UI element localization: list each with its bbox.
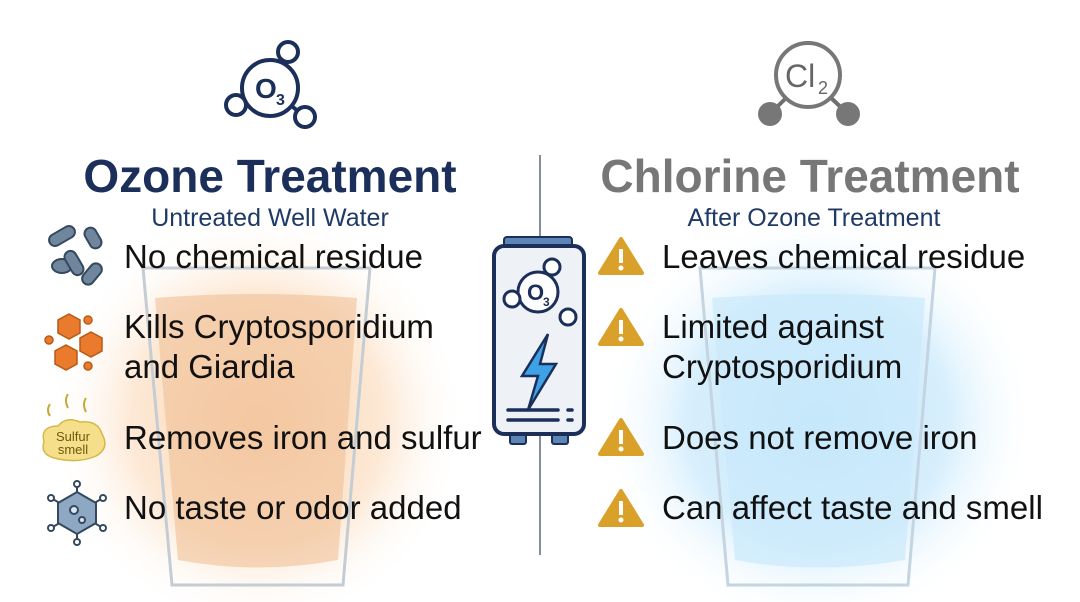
icon: ozone generator: 3 bbox=[543, 295, 550, 309]
icon: sulfur smell bbox=[42, 394, 106, 462]
icon: ozone generator: O bbox=[527, 280, 544, 305]
icon: virus bbox=[47, 480, 107, 546]
text: con 3: Does not remove iron bbox=[662, 419, 977, 456]
text: item 1: No chemical residue bbox=[124, 238, 423, 275]
text: con 2: Limited against bbox=[662, 308, 884, 345]
icon: O3 molecule: O bbox=[255, 73, 277, 104]
subtitle: ozone: Untreated Well Water bbox=[151, 204, 389, 232]
text: con 1: Leaves chemical residue bbox=[662, 238, 1025, 275]
text: item 2 bbox=[124, 308, 434, 385]
icon: warning 1 bbox=[598, 236, 644, 275]
icon: warning 4 bbox=[598, 488, 644, 527]
text: item 2: and Giardia bbox=[124, 348, 295, 385]
icon: Cl2 molecule: 2 bbox=[818, 78, 828, 98]
text: item 4: No taste or odor added bbox=[124, 489, 462, 526]
title: ozone: Ozone Treatment bbox=[83, 150, 457, 202]
icon: sulfur smell: smell bbox=[58, 442, 88, 457]
icon: sulfur smell: Sulfur bbox=[56, 429, 91, 444]
icon: warning 2 bbox=[598, 308, 644, 346]
icon: O3 molecule: 3 bbox=[276, 92, 285, 109]
text: item 2: Kills Cryptosporidium bbox=[124, 308, 434, 345]
icon: O3 molecule bbox=[224, 40, 317, 129]
icon: bacteria bbox=[48, 225, 103, 286]
text: con 4: Can affect taste and smell bbox=[662, 489, 1043, 526]
title: chlorine: Chlorine Treatment bbox=[600, 150, 1020, 202]
icon: ozone generator bbox=[492, 236, 586, 445]
text: item 3: Removes iron and sulfur bbox=[124, 419, 482, 456]
text: con 2 bbox=[662, 308, 902, 385]
text: con 2: Cryptosporidium bbox=[662, 348, 902, 385]
icon: Cl2 molecule bbox=[758, 41, 860, 126]
icon: warning 3 bbox=[598, 418, 644, 456]
subtitle: chlorine: After Ozone Treatment bbox=[688, 204, 940, 232]
icon: cubes bbox=[44, 313, 103, 371]
icon: Cl2 molecule: Cl bbox=[785, 58, 815, 94]
